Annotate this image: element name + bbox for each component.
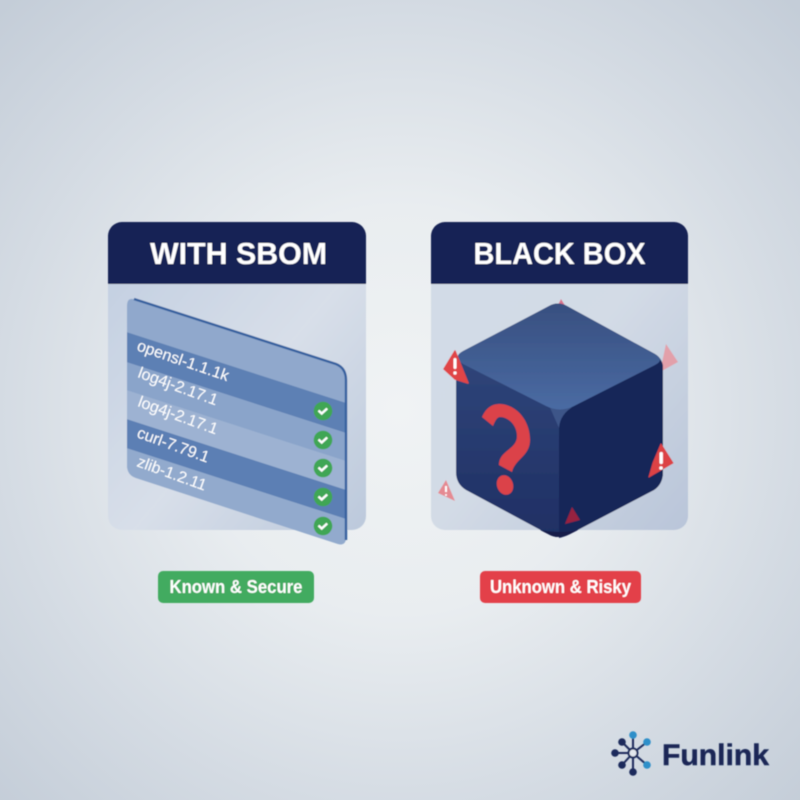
sheet edge [134, 299, 346, 540]
icon: check 2 [314, 431, 332, 449]
icon: check 1 [314, 402, 332, 420]
cube corner chamfer [548, 403, 574, 428]
cube top face [458, 304, 660, 410]
component name: curl: curl-7.79.1 [135, 425, 212, 467]
icon: check 3 [314, 459, 332, 477]
component name: log4j: log4j-2.17.1 [136, 365, 220, 409]
icon: faded warning lower left [438, 480, 455, 501]
icon: warning on bottom of cube [565, 507, 580, 524]
panel: black box [431, 222, 688, 538]
component name: openssl: opensl-1.1.1k [135, 338, 232, 385]
component name: zlib: zlib-1.2.11 [135, 454, 209, 495]
heading bar: with SBOM [108, 222, 366, 284]
question mark [482, 404, 530, 497]
badge: known and secure: Known & Secure [170, 577, 302, 597]
component list sheet [126, 298, 348, 545]
icon: warning behind top of cube [557, 299, 566, 307]
panel: with SBOM [108, 222, 366, 560]
logo mark [611, 731, 651, 776]
logo: Funlink [611, 731, 769, 776]
icon: check 4 [314, 488, 332, 506]
heading: WITH SBOM: WITH SBOM [150, 236, 327, 271]
sheet background and stripes [126, 298, 346, 545]
logo wordmark: Funlink [662, 739, 769, 772]
card body: with SBOM [108, 222, 366, 530]
cube bottom shade [540, 530, 578, 537]
icon: faded warning behind right of cube [660, 344, 678, 372]
badge: known and secure [158, 571, 314, 603]
card body: black box [431, 222, 688, 530]
icon: warning right [649, 444, 673, 477]
heading bar: black box [431, 222, 688, 284]
icon: warning top left [444, 351, 468, 383]
badge: unknown and risky: Unknown & Risky [490, 577, 631, 597]
black box cube [444, 304, 673, 538]
cube right face [559, 360, 663, 538]
component name: log4j: log4j-2.17.1 [136, 394, 220, 438]
heading: BLACK BOX: BLACK BOX [474, 236, 646, 271]
cube body and left face [456, 304, 663, 537]
badge: unknown and risky [480, 571, 641, 603]
icon: check 5 [314, 517, 332, 535]
